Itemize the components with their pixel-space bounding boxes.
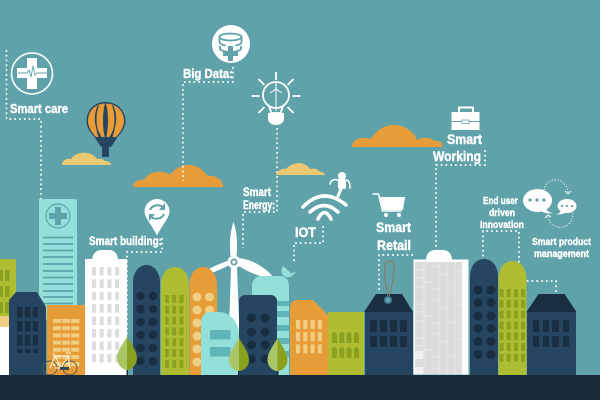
building: hospital tower [39, 199, 77, 320]
label: smart working: Working [433, 149, 481, 164]
label: big data: Big Data: [183, 66, 233, 81]
building: orange left [47, 305, 85, 375]
building: left green [0, 259, 16, 375]
building: orange right [290, 300, 328, 375]
cloud: orange centre [133, 165, 223, 187]
label: smart energy [243, 187, 275, 212]
cloud: pale right [276, 163, 325, 175]
connector: smart working [436, 150, 485, 250]
label: IOT: IOT [295, 224, 316, 240]
label: end user driven innovation: driven [489, 207, 515, 219]
icon: big data [212, 25, 250, 63]
connector: smart retail [379, 255, 413, 290]
icon: medical cross [12, 53, 52, 94]
icon: location refresh pin [144, 199, 170, 236]
icon: chat bubbles [523, 180, 576, 227]
building: orange pill [190, 267, 217, 375]
building: green pill [161, 267, 189, 375]
cloud: pale left [62, 153, 111, 165]
connector: IOT [294, 226, 323, 262]
connector: smart product [522, 281, 556, 296]
connector: smart building [127, 238, 162, 340]
tag string [385, 261, 394, 297]
building: cyan short [201, 312, 239, 375]
icon: robot on wifi [303, 172, 350, 219]
label: smart energy: Smart [243, 187, 271, 199]
building: white left [85, 250, 127, 375]
label: smart retail [376, 220, 411, 253]
label: smart building: Smart building: [89, 234, 162, 248]
connector: smart energy [243, 128, 277, 248]
icon: energy bulb [252, 72, 300, 125]
wifi arcs [303, 196, 346, 219]
tree: right [268, 338, 288, 375]
label: smart product management: management [534, 248, 589, 260]
building: navy pill right [470, 259, 498, 375]
cloud: orange right [352, 125, 442, 147]
label: smart working [433, 132, 482, 164]
icon: satellite dish [282, 266, 296, 277]
building: green pill right [498, 261, 526, 375]
building: green right [328, 312, 364, 375]
wind turbine [206, 222, 273, 358]
building: white tower [414, 250, 468, 374]
label: smart care: Smart care [10, 101, 68, 116]
building: navy left [9, 292, 46, 375]
building: navy pill [133, 265, 160, 375]
icon: bicycle [43, 353, 77, 375]
label: end user driven innovation: Innovation [480, 219, 524, 231]
label: smart product management [532, 236, 591, 260]
tree: left [117, 337, 137, 375]
label: smart energy: Energy: [243, 200, 275, 212]
ground [0, 375, 600, 400]
icon: briefcase [452, 108, 480, 130]
building: navy house right [526, 294, 576, 375]
connector: smart care [6, 50, 41, 229]
label: end user driven innovation [480, 195, 524, 231]
building: price tag house [364, 261, 413, 375]
hot air balloon [86, 102, 126, 157]
icon: shopping cart [372, 194, 405, 217]
connector: big data [183, 67, 233, 181]
label: end user driven innovation: End user [483, 195, 518, 207]
label: smart retail: Retail [377, 238, 411, 253]
connector: end user innovation [483, 231, 519, 266]
building: navy rounded [239, 295, 277, 375]
building: cyan tall [252, 276, 289, 375]
robot [330, 172, 350, 196]
label: smart working: Smart [447, 132, 482, 147]
label: smart retail: Smart [376, 220, 411, 235]
tree: centre [229, 338, 249, 375]
